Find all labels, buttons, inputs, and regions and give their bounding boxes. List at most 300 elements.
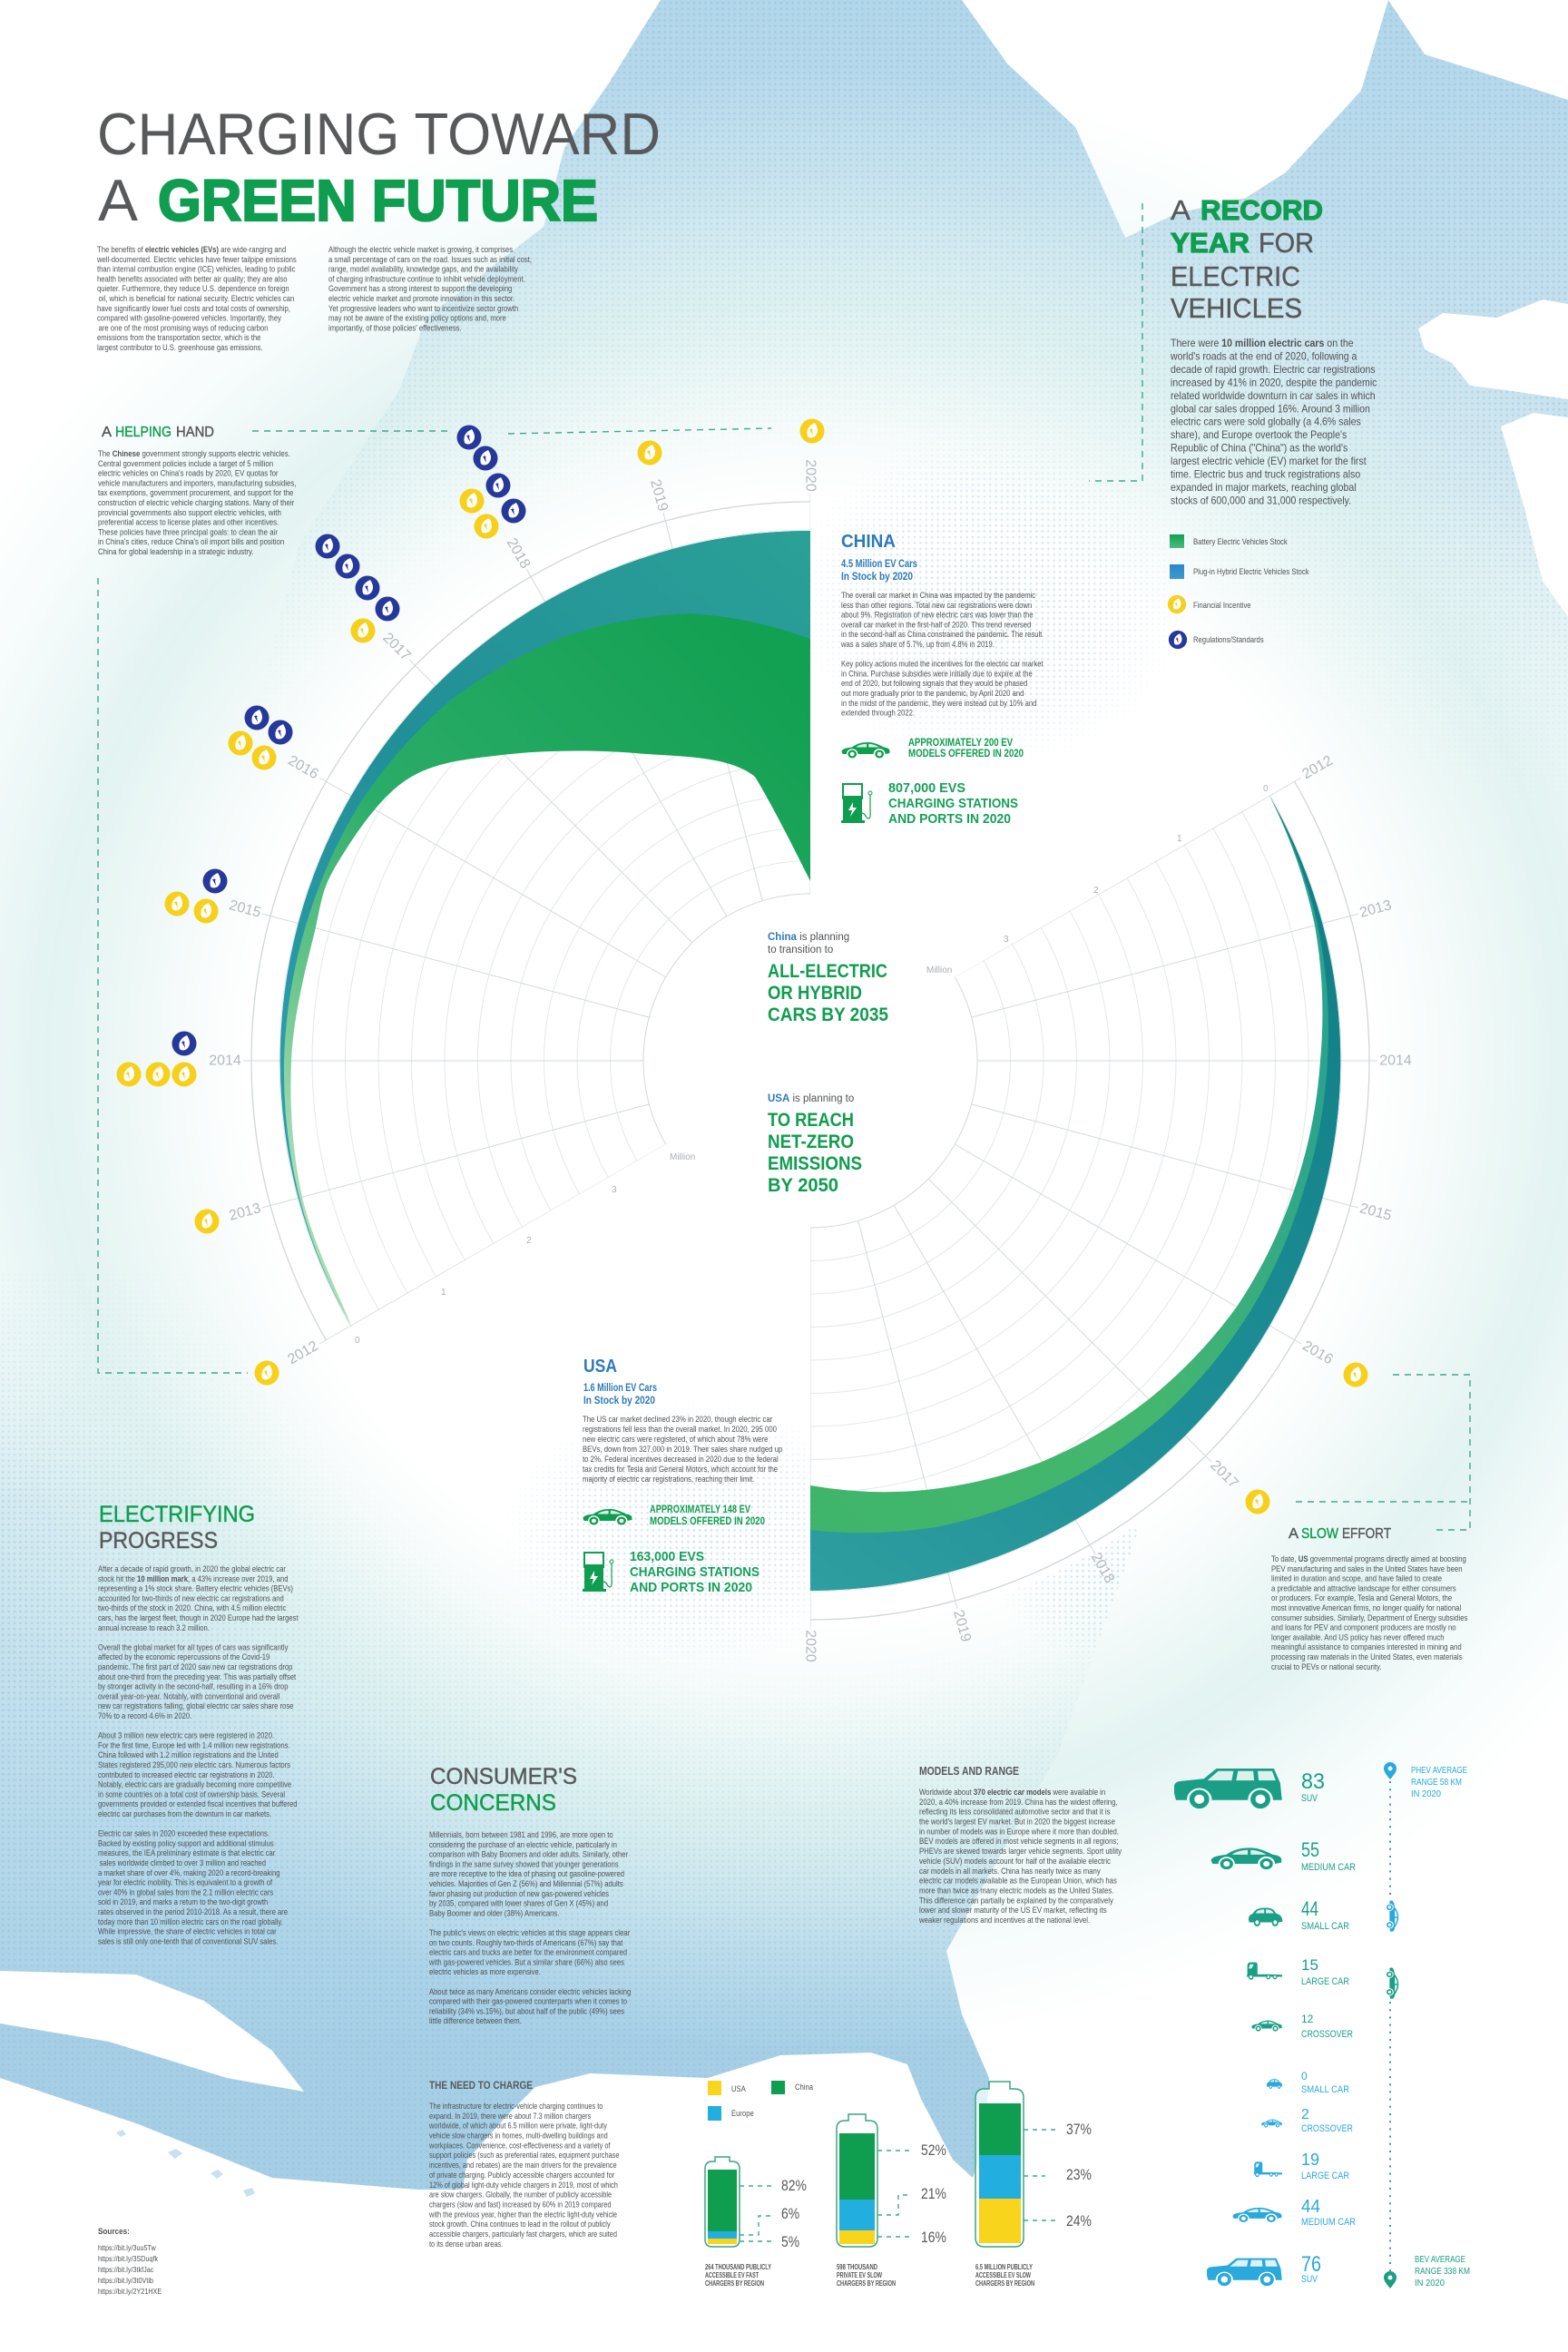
body text: by stronger activity in the second-half, resulting in a 16% drop: [98, 1681, 289, 1691]
heading: [99, 1502, 255, 1553]
body text: related worldwide downturn in car sales in which: [1171, 390, 1376, 402]
body text: more than twice as many electric models as the United States.: [919, 1886, 1113, 1896]
year labels: 2014: [209, 1053, 241, 1069]
body text: affected by the economic repercussions of the Covid-19: [98, 1651, 270, 1661]
heading: EFFORT: [1342, 1526, 1391, 1542]
panel: China: [840, 532, 1044, 827]
intro text right: may not be aware of the existing policy options and, more: [328, 313, 506, 323]
body text: favor phasing out production of new gas-powered vehicles: [429, 1888, 610, 1898]
callout: USA plan: USA is planning to: [768, 1093, 854, 1104]
body text: and loans for PEV and component producers are mostly no: [1271, 1622, 1456, 1632]
body text: two-thirds of the stock in 2020. China, with 4.5 million electric: [98, 1602, 287, 1612]
sources: Sources:: [98, 2226, 130, 2236]
body text: expanded in major markets, reaching global: [1171, 483, 1357, 494]
BEV models: 2: [1301, 2107, 1309, 2122]
panel: USA: [583, 1357, 782, 1595]
panel: electrifying progress: [98, 1502, 299, 1946]
body text: majority of electric car registrations, reaching their limit.: [583, 1474, 754, 1484]
body text: worldwide, of which about 6.5 million were private, light-duty: [428, 2121, 608, 2131]
charging stations text: 163,000 EVS: [630, 1549, 704, 1564]
body text: China for global leadership in a strategic industry.: [98, 546, 254, 556]
panel: battery charts: [705, 2081, 1092, 2288]
panel: a record year: [1168, 194, 1377, 649]
body text: contributed to increased electric car registrations in 2020.: [98, 1769, 275, 1779]
legend: [1168, 534, 1309, 649]
body text: After a decade of rapid growth, in 2020 the global electric car: [98, 1563, 286, 1573]
callout: USA plan: NET-ZERO: [768, 1132, 854, 1152]
body text: weaker regulations and incentives at the national level.: [918, 1915, 1090, 1925]
EV models text: [650, 1504, 765, 1527]
body text: longer available. And US policy has never offered much: [1271, 1632, 1445, 1642]
body text: Worldwide about 370 electric car models were available in: [919, 1787, 1105, 1797]
PHEV models: [1174, 1769, 1356, 2040]
title: A: [98, 167, 139, 233]
body text: or producers. For example, Tesla and General Motors, the: [1271, 1592, 1452, 1602]
body text: annual increase to reach 3.2 million.: [98, 1622, 210, 1632]
charging stations text: [888, 780, 1018, 827]
radial chart: [209, 459, 1412, 1662]
body text: lower and slower maturity of the US EV market, reflecting its: [919, 1905, 1107, 1915]
BEV models: [1207, 2070, 1356, 2286]
body text: a predictable and attractive landscape for either consumers: [1271, 1583, 1456, 1593]
body text: provincial governments also support electric vehicles, with: [98, 507, 281, 517]
heading: PROGRESS: [99, 1528, 218, 1553]
body text: time. Electric bus and truck registrations also: [1171, 469, 1360, 481]
intro text left: compared with gasoline-powered vehicles. Importantly, they: [97, 313, 281, 323]
subheading: [583, 1383, 657, 1406]
BEV models: SMALL CAR: [1301, 2084, 1349, 2095]
body text: The overall car market in China was impacted by the pandemic: [841, 590, 1036, 600]
intro text right: Although the electric vehicle market is growing, it comprises: [328, 244, 514, 254]
PHEV models: 15: [1301, 1956, 1318, 1974]
subheading: 4.5 Million EV Cars: [841, 559, 917, 570]
charging stations text: CHARGING STATIONS: [630, 1564, 760, 1580]
sources: https://bit.ly/3t0Vtib: [98, 2276, 154, 2285]
body text: There were 10 million electric cars on the: [1171, 338, 1354, 349]
battery: private slow chargers: [837, 2114, 946, 2288]
icon: car: [583, 1509, 632, 1524]
PHEV models: LARGE CAR: [1301, 1976, 1349, 1987]
year labels: 2017: [1207, 1457, 1241, 1492]
battery: public slow chargers: 37%: [1066, 2122, 1092, 2138]
intro text left: quieter. Furthermore, they reduce U.S. dependence on foreign: [97, 283, 289, 293]
body text: accounted for two-thirds of new electric car registrations and: [98, 1593, 284, 1603]
body text: About 3 million new electric cars were registered in 2020.: [98, 1730, 274, 1740]
body text: 70% to a record 4.6% in 2020.: [98, 1710, 191, 1720]
heading: THE NEED TO CHARGE: [429, 2079, 533, 2092]
intro text right: of charging infrastructure continue to inhibit vehicle deployment.: [328, 274, 525, 284]
intro text right: Yet progressive leaders who want to incentivize sector growth: [328, 303, 518, 313]
intro text left: are one of the most promising ways of reducing carbon: [99, 323, 269, 333]
body text: incentives, and rebates) are the main drivers for the prevalence: [429, 2160, 617, 2170]
body text: in China's cities, reduce China's oil import bills and position: [98, 536, 284, 546]
body text: vehicle manufacturers and importers, manufacturing subsidies,: [98, 478, 296, 488]
body text: considering the purchase of an electric vehicle, particularly in: [429, 1839, 617, 1849]
body text: Central government policies include a target of 5 million: [98, 458, 273, 468]
heading: YEAR: [1171, 227, 1250, 259]
intro text right: Government has a strong interest to support the developing: [328, 283, 512, 293]
year labels: 2020: [802, 459, 818, 492]
year labels: 2015: [1358, 1200, 1393, 1224]
range timeline: [1384, 1762, 1398, 2288]
callout: China plan: [768, 932, 888, 1025]
body text: reflecting its less consolidated automotive sector and that it is: [919, 1807, 1111, 1817]
body text: 2020, a 40% increase from 2019. China has the widest offering,: [919, 1797, 1118, 1807]
sources: https://bit.ly/3SDuqfk: [98, 2254, 158, 2263]
callout: China plan: China is planning: [768, 932, 849, 943]
intro text left: emissions from the transportation sector, which is the: [97, 332, 261, 342]
body text: new car registrations falling, global electric car sales share rose: [98, 1700, 294, 1710]
callout: China plan: OR HYBRID: [768, 983, 862, 1004]
year labels: 2017: [379, 630, 414, 664]
heading: ELECTRIFYING: [99, 1502, 255, 1527]
China stock area: [280, 531, 810, 1326]
axis scale labels: 1: [1177, 834, 1182, 844]
USA PHEV area: [810, 796, 1340, 1591]
body text: reliability (34% vs.15%), but about half of the public (49%) sees: [429, 2006, 625, 2016]
body text: governments provided or extended fiscal incentives that buffered: [98, 1798, 298, 1808]
body text: largest electric vehicle (EV) market for the first: [1171, 456, 1367, 467]
body text: to 2%. Federal incentives decreased in 2020 due to the federal: [583, 1454, 779, 1464]
battery: private slow chargers: 16%: [921, 2230, 946, 2246]
body text: stock growth. China continues to lead in the rollout of publicly: [429, 2219, 611, 2229]
BEV models: 0: [1301, 2070, 1308, 2082]
heading: ELECTRIC: [1171, 260, 1300, 292]
body text: Millennials, born between 1981 and 1996, are more open to: [429, 1829, 613, 1839]
body text: States registered 295,000 new electric cars. Numerous factors: [98, 1759, 291, 1769]
body text: global car sales dropped 16%. Around 3 million: [1171, 404, 1370, 415]
year labels: 2018: [1088, 1550, 1117, 1586]
EV models text: MODELS OFFERED IN 2020: [908, 749, 1024, 760]
EV models text: APPROXIMATELY 200 EV: [908, 738, 1013, 749]
body text: in some countries on a total cost of ownership basis. Several: [98, 1789, 285, 1799]
year labels: 2014: [1379, 1053, 1412, 1069]
BEV models: 19: [1301, 2151, 1319, 2169]
body text: For the first time, Europe led with 1.4 million new registrations.: [98, 1740, 290, 1750]
heading: A: [102, 425, 112, 440]
PHEV models: 12: [1301, 2013, 1314, 2025]
body text: extended through 2022.: [841, 708, 915, 718]
body text: with the previous year, higher than the electric light-duty vehicle: [428, 2209, 617, 2220]
battery: private slow chargers: 598 THOUSAND: [837, 2262, 877, 2271]
PHEV models: 55: [1301, 1838, 1319, 1861]
battery: fast chargers: ACCESSIBLE EV FAST: [705, 2270, 759, 2279]
axis scale labels: 0: [1263, 784, 1269, 794]
PHEV range label: PHEV AVERAGE: [1411, 1765, 1467, 1776]
body text: Republic of China ("China") as the world's: [1171, 443, 1348, 455]
year labels: 2013: [228, 1200, 262, 1224]
body text: sold in 2019, and marks a return to the two-digit growth: [98, 1896, 268, 1906]
heading: A: [1171, 194, 1191, 226]
body text: electric car purchases from the downturn in car markets.: [98, 1808, 271, 1818]
body text: expand. In 2019, there were about 7.3 million chargers: [429, 2111, 591, 2121]
intro text left: than internal combustion engine (ICE) vehicles, leading to public: [97, 264, 296, 274]
body text: electric vehicles as more expensive.: [429, 1966, 541, 1976]
year labels: 2013: [1358, 897, 1393, 921]
title: GREEN FUTURE: [158, 168, 598, 233]
BEV models: SUV: [1301, 2274, 1318, 2285]
battery: public slow chargers: ACCESSIBLE EV SLOW: [975, 2270, 1032, 2279]
EV models text: MODELS OFFERED IN 2020: [650, 1516, 765, 1527]
body text: on two counts. Roughly two-thirds of Americans (67%) say that: [429, 1937, 623, 1947]
axis scale labels: 1: [441, 1288, 446, 1298]
heading: RECORD: [1200, 194, 1323, 226]
battery: public slow chargers: 6.5 MILLION PUBLICLY: [975, 2262, 1033, 2271]
year labels: [209, 459, 1412, 1662]
intro text right: importantly, of those policies' effectiveness.: [328, 323, 462, 333]
heading: HELPING: [115, 425, 172, 440]
battery: private slow chargers: PRIVATE EV SLOW: [837, 2270, 883, 2279]
axis scale labels: 0: [355, 1336, 360, 1346]
charging stations text: CHARGING STATIONS: [888, 796, 1018, 811]
body text: to its dense urban areas.: [429, 2239, 503, 2249]
icon: car: [842, 742, 889, 759]
title: [97, 101, 661, 233]
axis scale labels: 3: [612, 1185, 617, 1195]
chart background sectors: [811, 1448, 1148, 1618]
BEV models: MEDIUM CAR: [1301, 2217, 1356, 2228]
body text: 12% of global light-duty vehicle chargers in 2019, most of which: [429, 2180, 618, 2190]
PHEV models: 44: [1301, 1897, 1318, 1920]
body text: sales is still only one-tenth that of conventional SUV sales.: [98, 1936, 278, 1946]
body text: sales worldwide climbed to over 3 million and reached: [100, 1857, 266, 1867]
heading: USA: [583, 1357, 617, 1377]
charging stations text: AND PORTS IN 2020: [888, 811, 1011, 827]
subheading: In Stock by 2020: [841, 572, 913, 583]
intro text left: well-documented. Electric vehicles have fewer tailpipe emissions: [96, 254, 297, 264]
sources: https://bit.ly/3uu5Tw: [98, 2243, 156, 2252]
body text: year for electric mobility. This is equivalent to a growth of: [98, 1877, 273, 1887]
subheading: In Stock by 2020: [583, 1396, 655, 1406]
intro text right: electric vehicle market and promote innovation in this sector.: [328, 293, 514, 303]
heading: CHINA: [841, 532, 896, 552]
year labels: 2015: [228, 897, 262, 921]
body text: Electric car sales in 2020 exceeded these expectations.: [98, 1828, 270, 1838]
body text: representing a 1% stock share. Battery electric vehicles (BEVs): [98, 1583, 293, 1593]
battery: private slow chargers: CHARGERS BY REGION: [837, 2278, 896, 2288]
body text: comparison with Baby Boomers and older adults. Similarly, other: [429, 1849, 628, 1859]
body text: share), and Europe overtook the People's: [1171, 430, 1348, 441]
callout: USA plan: TO REACH: [768, 1110, 854, 1131]
body text: was a sales share of 5.7%, up from 4.8% in 2019.: [840, 639, 995, 649]
body text: less than other regions. Total new car registrations were down: [841, 600, 1032, 610]
battery: fast chargers: 82%: [781, 2178, 807, 2194]
body text: PHEVs are skewed towards larger vehicle segments. Sport utility: [919, 1846, 1122, 1856]
body text: registrations fell less than the overall market. In 2020, 295 000: [583, 1424, 777, 1434]
dashed connector lines: [98, 203, 1470, 1530]
battery: public slow chargers: 24%: [1066, 2213, 1092, 2230]
charging stations text: [630, 1549, 760, 1595]
body text: electric car models available as the European Union, which has: [919, 1876, 1117, 1886]
charging stations text: AND PORTS IN 2020: [630, 1580, 752, 1595]
body text: in the second-half as China constrained the pandemic. The result: [841, 629, 1043, 639]
body text: little difference between them.: [429, 2015, 522, 2025]
body text: The Chinese government strongly supports electric vehicles.: [98, 448, 290, 458]
icon: charger: [841, 784, 872, 823]
battery: fast chargers: CHARGERS BY REGION: [705, 2278, 764, 2288]
body text: increased by 41% in 2020, despite the pandemic: [1171, 377, 1377, 389]
PHEV models: 83: [1301, 1769, 1325, 1794]
body text: limited in duration and scope, and have failed to create: [1271, 1573, 1442, 1583]
panel: a slow effort: [1271, 1526, 1468, 1671]
heading: MODELS AND RANGE: [919, 1765, 1019, 1778]
PHEV range label: RANGE 58 KM: [1411, 1777, 1462, 1788]
grid rings and spokes: [243, 494, 1377, 1628]
body text: The public's views on electric vehicles at this stage appears clear: [429, 1927, 630, 1937]
body text: Backed by existing policy support and additional stimulus: [98, 1838, 274, 1848]
battery: private slow chargers: 52%: [921, 2142, 946, 2159]
body text: tax exemptions, government procurement, and support for the: [98, 487, 294, 497]
battery: private slow chargers: 21%: [921, 2186, 946, 2202]
body text: electric cars and trucks are better for the environment compared: [429, 1947, 627, 1957]
year labels: 2012: [285, 1338, 321, 1367]
China PHEV area: [280, 531, 810, 1326]
body text: chargers (slow and fast) increased by 60% in 2019 compared: [429, 2200, 612, 2210]
body text: support policies (such as preferential rates, equipment purchase: [429, 2150, 620, 2160]
body text: about one-third from the preceding year. This was partially offset: [98, 1671, 297, 1681]
battery: public slow chargers: 23%: [1066, 2167, 1092, 2183]
USA stock area: [810, 796, 1340, 1591]
body text: most innovative American firms, no longer qualify for national: [1271, 1602, 1461, 1612]
body text: The US car market declined 23% in 2020, though electric car: [583, 1414, 772, 1424]
panel: vehicle models chart: [1174, 1762, 1470, 2288]
body text: Notably, electric cars are gradually becoming more competitive: [98, 1779, 291, 1789]
body text: About twice as many Americans consider electric vehicles lacking: [429, 1986, 631, 1996]
PHEV range label: [1411, 1765, 1467, 1799]
body text: measures, the IEA preliminary estimate is that electric car: [98, 1847, 275, 1857]
body text: new electric cars were registered, of which about 78% were: [583, 1434, 769, 1444]
BEV models: 44: [1301, 2197, 1320, 2217]
USA BEV area: [810, 796, 1340, 1591]
body text: electric vehicles on China's roads by 2020, EV quotas for: [98, 468, 279, 478]
body text: These policies have three principal goals: to clean the air: [98, 527, 278, 537]
body text: today more than 10 million electric cars on the road globally.: [98, 1916, 283, 1926]
body text: crucial to PEVs or national security.: [1271, 1661, 1382, 1671]
BEV range label: BEV AVERAGE: [1415, 2254, 1465, 2265]
body text: end of 2020, but following signals that they would be phased: [841, 678, 1027, 688]
axis scale labels: 3: [1004, 935, 1009, 945]
body text: are more receptive to the idea of phasing out gasoline-powered: [429, 1868, 624, 1878]
callout: USA plan: [768, 1093, 862, 1196]
charging stations text: 807,000 EVS: [888, 780, 965, 796]
body text: in the midst of the pandemic, they were instead cut by 10% and: [841, 698, 1037, 708]
body text: rates observed in the period 2010-2018. As a result, there are: [98, 1906, 288, 1916]
panel: models and range: [918, 1765, 1122, 1925]
policy icons: [116, 419, 1368, 1514]
legend: USA: [731, 2083, 746, 2093]
body text: To date, US governmental programs directly aimed at boosting: [1271, 1553, 1466, 1563]
legend: Battery Electric Vehicles Stock: [1193, 536, 1288, 546]
body text: electric cars were sold globally (a 4.6% sales: [1171, 416, 1361, 428]
body text: are slow chargers. Globally, the number of publicly accessible: [429, 2190, 612, 2200]
intro text left: largest contributor to U.S. greenhouse gas emissions.: [97, 342, 263, 352]
body text: Overall the global market for all types of cars was significantly: [98, 1642, 289, 1652]
body text: out more gradually prior to the pandemic, by April 2020 and: [841, 688, 1024, 698]
heading: [102, 425, 214, 440]
battery: fast chargers: 5%: [781, 2234, 799, 2250]
heading: [430, 1764, 577, 1816]
body text: car models in all markets. China has nearly twice as many: [919, 1866, 1101, 1876]
body text: consumer subsidies. Similarly, Department of Energy subsidies: [1271, 1612, 1468, 1622]
body text: overall year-on-year. Notably, with conventional and overall: [98, 1691, 279, 1701]
axis scale labels: 2: [1093, 886, 1099, 896]
battery: fast chargers: 264 THOUSAND PUBLICLY: [705, 2262, 771, 2271]
body text: BEV models are offered in most vehicle segments in all regions;: [919, 1836, 1118, 1846]
callout: China plan: to transition to: [768, 945, 833, 956]
body text: in China. Purchase subsidies were initially due to expire at the: [841, 669, 1033, 679]
PHEV models: CROSSOVER: [1301, 2029, 1353, 2040]
body text: preferential access to license plates and other incentives.: [98, 517, 279, 527]
legend: Regulations/Standards: [1193, 634, 1264, 644]
intro text left: health benefits associated with better air quality; they are also: [97, 274, 288, 284]
axis scale labels: Million: [926, 965, 952, 975]
subheading: 1.6 Million EV Cars: [583, 1383, 657, 1394]
legend: China: [795, 2082, 813, 2092]
year labels: 2012: [1299, 753, 1336, 782]
axis scale labels: 2: [526, 1236, 532, 1246]
axis scale labels: [355, 784, 1269, 1346]
body text: of private charging. Publicly accessible chargers accounted for: [429, 2170, 614, 2180]
intro text right: a small percentage of cars on the road. Issues such as initial cost,: [328, 254, 532, 264]
PHEV range label: IN 2020: [1411, 1788, 1441, 1799]
body text: cars, has the largest fleet, though in 2020 Europe had the largest: [98, 1612, 299, 1622]
BEV models: 76: [1301, 2252, 1321, 2277]
body text: in number of models was in Europe where it more than doubled.: [919, 1827, 1119, 1837]
sources: https://bit.ly/3tkfJac: [98, 2265, 153, 2274]
body text: While impressive, the share of electric vehicles in total car: [98, 1926, 277, 1936]
intro text left: have significantly lower fuel costs and total costs of ownership,: [97, 303, 290, 313]
legend: Financial Incentive: [1193, 600, 1251, 610]
heading: [1289, 1526, 1391, 1542]
heading: [1171, 194, 1323, 324]
body text: compared with their gas-powered counterparts when it comes to: [429, 1996, 627, 2006]
body text: pandemic. The first part of 2020 saw new car registrations drop: [98, 1661, 293, 1671]
China BEV area: [280, 531, 810, 1326]
panel: a helping hand: [98, 425, 296, 556]
BEV range label: [1415, 2254, 1470, 2288]
body text: the world's largest EV market. But in 2020 the biggest increase: [919, 1817, 1115, 1827]
body text: about 9%. Registration of new electric cars was lower than the: [841, 610, 1034, 620]
EV models text: APPROXIMATELY 148 EV: [650, 1504, 750, 1515]
body text: This difference can partially be explained by the comparatively: [919, 1896, 1113, 1906]
body text: Key policy actions muted the incentives for the electric car market: [841, 659, 1044, 669]
callout: USA plan: BY 2050: [768, 1175, 838, 1196]
callout: China plan: CARS BY 2035: [768, 1004, 888, 1025]
body text: meaningful assistance to companies interested in mining and: [1271, 1642, 1462, 1651]
body text: over 40% in global sales from the 2.1 million electric cars: [98, 1887, 274, 1897]
battery: public slow chargers: CHARGERS BY REGION: [975, 2278, 1034, 2288]
title: CHARGING TOWARD: [97, 101, 661, 167]
battery: public slow chargers: [975, 2082, 1092, 2288]
heading: CONSUMER'S: [430, 1764, 577, 1789]
subheading: [841, 559, 917, 583]
body text: tax credits for Tesla and General Motors, which account for the: [583, 1464, 778, 1474]
body text: findings in the same survey showed that younger generations: [429, 1859, 619, 1869]
heading: FOR: [1259, 227, 1314, 259]
PHEV models: SUV: [1301, 1793, 1318, 1804]
battery: fast chargers: 6%: [781, 2206, 799, 2222]
body text: with gas-powered vehicles. But a similar share (66%) also sees: [428, 1957, 625, 1967]
intro text left: The benefits of electric vehicles (EVs) are wide-ranging and: [97, 244, 286, 254]
legend: Plug-in Hybrid Electric Vehicles Stock: [1193, 566, 1309, 576]
body text: PEV manufacturing and sales in the United States have been: [1271, 1563, 1463, 1573]
year labels: 2020: [802, 1630, 818, 1662]
intro text right: range, model availability, knowledge gaps, and the availability: [328, 264, 518, 274]
body text: vehicle (SUV) models account for half of the available electric: [919, 1856, 1112, 1866]
year labels: 2019: [950, 1609, 974, 1643]
legend: Europe: [731, 2108, 754, 2118]
intro text left: oil, which is beneficial for national security. Electric vehicles can: [99, 293, 294, 303]
